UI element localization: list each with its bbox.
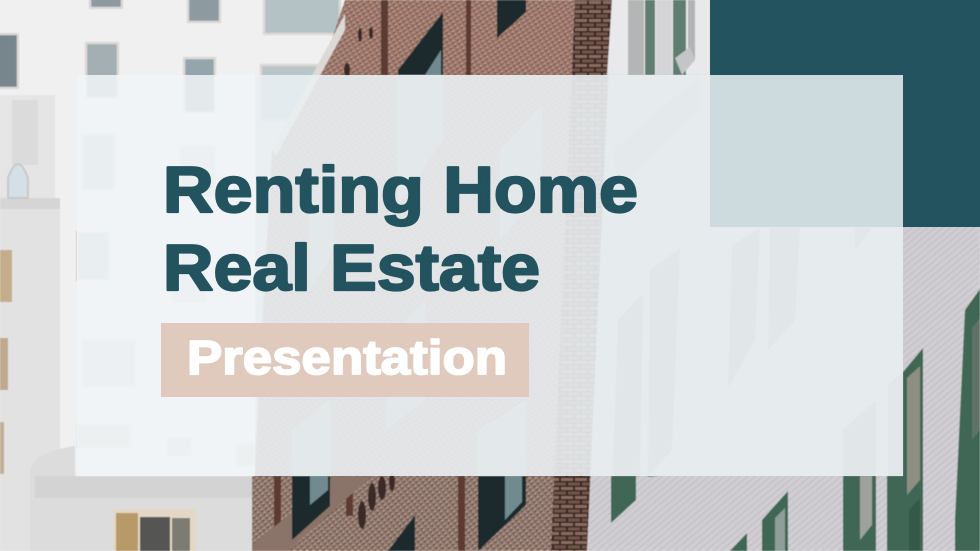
cornice [252, 476, 372, 551]
green windows [611, 289, 980, 551]
window ornament behind overlay [612, 75, 700, 190]
title line 2: Real Estate [163, 231, 540, 304]
windows behind overlay [292, 75, 542, 476]
white building, right [587, 0, 980, 551]
bottom shop window [113, 509, 196, 551]
title line 1: Renting Home [163, 153, 638, 226]
light tinted square [710, 75, 903, 227]
dark windows [292, 0, 526, 551]
vertical dark brick strips [274, 0, 471, 551]
dark brick corner column [551, 0, 612, 551]
window panes [775, 318, 980, 551]
brick building [252, 0, 612, 551]
teal corner block [710, 0, 980, 227]
translucent white panel [77, 75, 903, 476]
windows behind overlay [612, 228, 903, 495]
white building, left [0, 0, 360, 551]
title [163, 153, 638, 304]
windows, left building [0, 0, 340, 466]
subtitle badge [161, 323, 529, 397]
subtitle: Presentation [187, 332, 507, 385]
